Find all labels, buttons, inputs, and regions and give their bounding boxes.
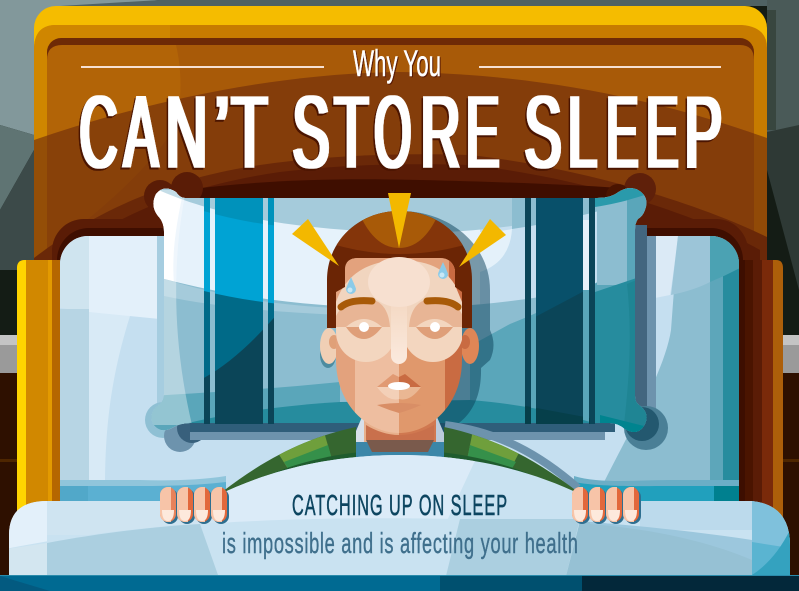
title letters: L	[568, 74, 597, 190]
subtitle heading: CATCHING UP ON SLEEP	[292, 489, 507, 521]
sweat drop left	[346, 277, 356, 294]
forehead highlight	[368, 257, 430, 307]
title rule right	[479, 66, 721, 68]
left hand	[160, 487, 229, 524]
title shadow: E	[464, 76, 498, 192]
mattress	[60, 236, 739, 501]
pillow shadow	[145, 225, 668, 452]
title shadow: P	[683, 76, 721, 192]
title letters: E	[646, 74, 678, 190]
title letters: S	[524, 74, 562, 190]
title letters: A	[124, 74, 158, 190]
blanket	[9, 455, 790, 575]
title shadow: E	[645, 76, 677, 192]
headboard	[34, 6, 767, 318]
right arm shadow	[445, 425, 578, 488]
pillow stripes left	[204, 198, 274, 424]
title letters: N	[166, 74, 207, 190]
alarm spike top	[388, 193, 411, 248]
sweat drop right	[438, 262, 448, 279]
title shadow: N	[164, 76, 206, 192]
right eye	[416, 319, 453, 339]
title shadow: C	[78, 76, 116, 192]
title letters: O	[374, 74, 411, 190]
title letters	[80, 74, 722, 190]
lower fold shadow	[9, 518, 448, 548]
neck	[364, 415, 436, 452]
shirt collar	[353, 417, 446, 458]
alarm spike left	[292, 219, 339, 266]
title shadow: T	[333, 76, 367, 192]
alarm spike right	[459, 219, 506, 267]
left ear	[320, 328, 339, 368]
title letters: ’	[214, 74, 230, 190]
face	[336, 258, 462, 433]
title letters: E	[466, 74, 499, 190]
right ear	[460, 328, 479, 364]
mouth	[377, 374, 421, 413]
title shadow: S	[523, 76, 560, 192]
character	[320, 200, 480, 458]
right sleeve	[444, 427, 574, 491]
title letters: T	[334, 74, 368, 190]
left eyebrow	[341, 301, 372, 307]
title letters: P	[684, 74, 722, 190]
pillow stripes right	[525, 198, 595, 424]
nose	[391, 292, 407, 364]
hair	[327, 211, 472, 328]
title shadow: R	[419, 76, 459, 192]
right bed post	[739, 260, 783, 520]
left sleeve	[225, 427, 356, 491]
title shadow: E	[605, 76, 637, 192]
right hand	[572, 487, 641, 524]
title letters: T	[231, 74, 268, 190]
title shadow: A	[122, 76, 157, 192]
title shadow: O	[373, 76, 410, 192]
title letters: R	[421, 74, 460, 190]
metal side rails	[0, 335, 799, 373]
main title	[78, 74, 722, 192]
right eyebrow	[427, 301, 458, 307]
floor strip	[0, 575, 799, 591]
subtitle body: is impossible and is affecting your health	[222, 528, 578, 560]
title kicker: Why You	[353, 43, 441, 84]
title shadow: L	[566, 76, 596, 192]
left bed post	[17, 260, 60, 520]
title shadow: ’	[212, 76, 228, 192]
left eye	[346, 319, 382, 339]
title letters: S	[292, 74, 330, 190]
pillow	[150, 180, 660, 440]
title letters: C	[80, 74, 117, 190]
title letters: E	[606, 74, 638, 190]
title shadow: S	[291, 76, 328, 192]
title shadow	[78, 76, 721, 192]
title kicker	[353, 43, 442, 85]
title kicker: Why You	[354, 44, 442, 85]
head shadow	[400, 211, 494, 433]
title rule left	[81, 66, 324, 68]
title shadow: T	[230, 76, 266, 192]
